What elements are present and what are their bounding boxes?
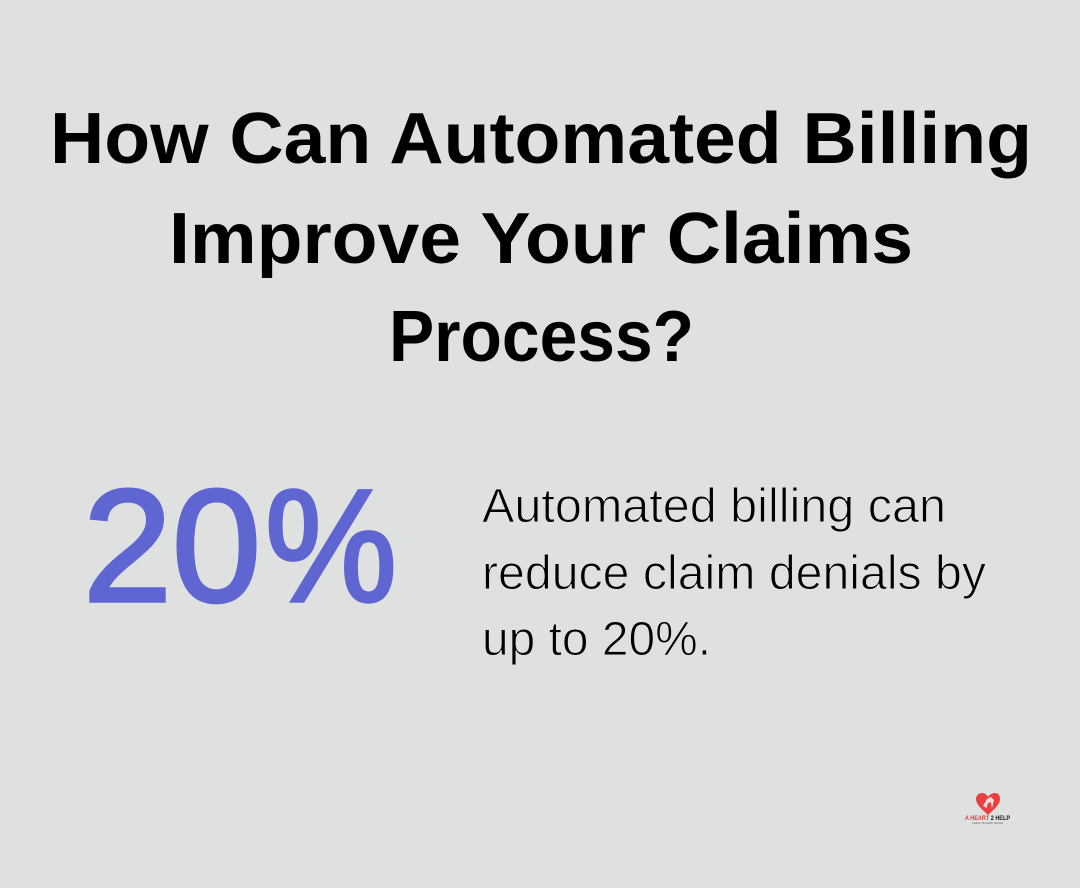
title bbox=[50, 99, 1032, 377]
title: Improve Your Claims bbox=[169, 199, 913, 279]
logo tagline: DISABILITY AND ELDERLY SERVICES bbox=[972, 821, 1003, 825]
icon: hands in heart bbox=[983, 797, 994, 808]
description text: up to 20%. bbox=[482, 613, 711, 666]
title: How Can Automated Billing bbox=[50, 99, 1032, 179]
description text bbox=[482, 480, 986, 666]
big statistic: 20%: % bbox=[265, 456, 397, 635]
title: Process? bbox=[389, 297, 694, 377]
icon: heart bbox=[976, 793, 1000, 815]
big statistic: 20%: 2 bbox=[83, 456, 172, 635]
logo: A Heart 2 Help bbox=[965, 793, 1011, 825]
description text: reduce claim denials by bbox=[482, 547, 986, 600]
logo wordmark: A HEART 2 HELP bbox=[965, 815, 1011, 822]
big statistic: 20% bbox=[83, 456, 397, 635]
big statistic: 20%: 0 bbox=[172, 456, 261, 635]
description text: Automated billing can bbox=[482, 480, 946, 533]
